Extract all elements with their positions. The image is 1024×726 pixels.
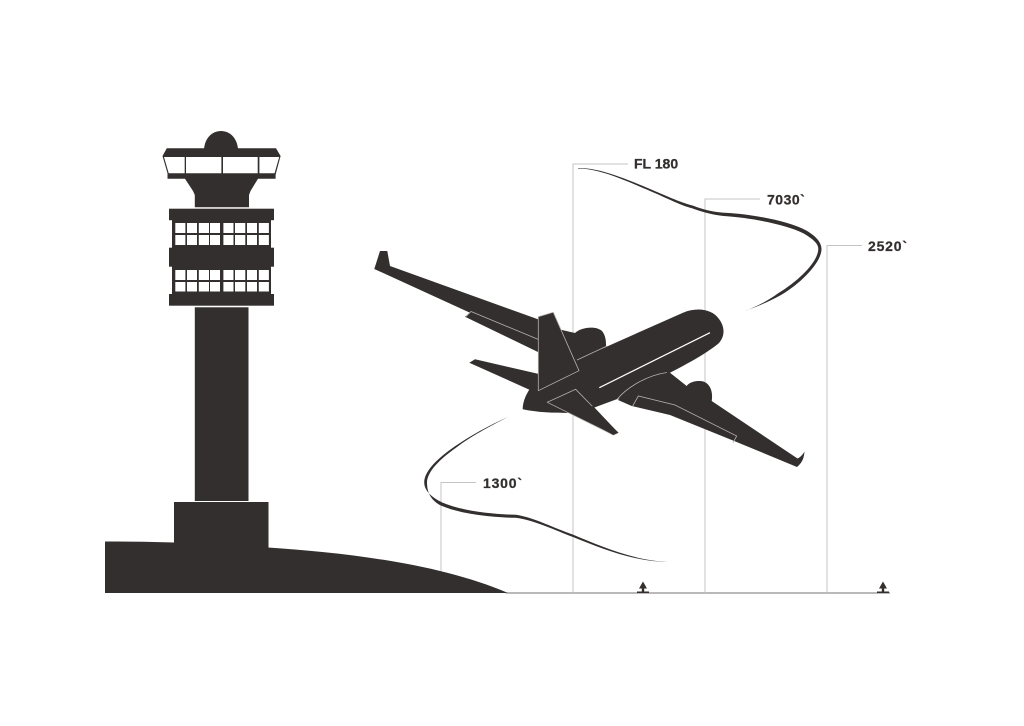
- altitude marker: 1300: [441, 475, 523, 574]
- lower window grid: [172, 266, 271, 295]
- altitude marker: FL 180: [573, 156, 678, 593]
- runway light 2: [877, 582, 889, 593]
- tower shaft: [195, 307, 248, 501]
- left wing flap line: [466, 312, 538, 340]
- altitude marker: 7030: [705, 192, 805, 593]
- altitude marker: 1300: 1300`: [483, 475, 523, 491]
- ground line: [506, 592, 890, 594]
- right tailplane: [547, 389, 618, 435]
- right wing: [618, 373, 804, 467]
- airplane: [374, 251, 804, 467]
- tower dome: [204, 131, 238, 149]
- middle floor band: [169, 248, 274, 267]
- altitude marker: FL 180: FL 180: [634, 156, 678, 172]
- left tailplane: [469, 359, 539, 392]
- altitude marker: 2520: [827, 238, 908, 593]
- ground hill: [105, 542, 508, 593]
- upper floor block: [169, 209, 274, 220]
- tower base: [174, 502, 268, 548]
- altitude marker: 2520: 2520`: [868, 238, 908, 254]
- flight path: upper curve: [578, 168, 822, 314]
- fuselage edge line: [577, 346, 607, 360]
- lower floor block: [169, 294, 274, 306]
- cab window frame and panels: [162, 156, 281, 175]
- upper window grid: [172, 220, 271, 248]
- cab underside and neck: [168, 174, 276, 207]
- fuselage: [523, 310, 724, 413]
- right wing lines: [617, 372, 737, 443]
- altitude marker: 7030: 7030`: [767, 192, 805, 208]
- cabin centre line: [599, 333, 710, 388]
- tower roof: [162, 148, 281, 157]
- runway light 1: [637, 582, 649, 593]
- flight path: lower curve: [424, 417, 667, 562]
- control tower: [162, 131, 281, 548]
- left wing: [374, 251, 606, 365]
- vertical tail fin: [538, 312, 579, 391]
